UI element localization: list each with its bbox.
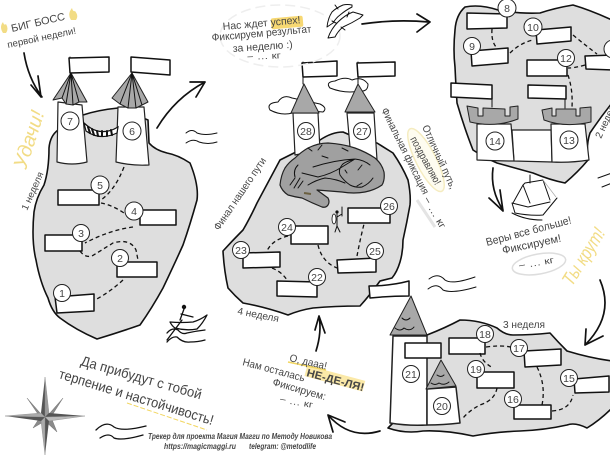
checkpoint 12	[527, 50, 574, 76]
label: week 4: 4 неделя	[236, 306, 280, 325]
dragon	[280, 143, 384, 207]
tower 21	[390, 296, 427, 425]
waves near week 1	[186, 130, 217, 144]
slogan: patience: терпение и настойчивость!	[57, 366, 216, 428]
checkpoint 25: 25	[369, 246, 381, 258]
heading: big boss: БИГ БОСС	[10, 11, 67, 35]
tower 27: 27	[356, 126, 368, 138]
tower 6: 6	[129, 126, 135, 138]
slogan: patience: Да прибудут с тобой	[79, 353, 204, 402]
speech bubble: success: Фиксируем результат	[211, 23, 312, 44]
castle with towers 14 and 13: 13	[563, 135, 575, 147]
arrow: up to week 4	[315, 316, 325, 351]
checkpoint 22: 22	[311, 272, 323, 284]
arrow: to week 3	[585, 280, 605, 345]
credits: https://magicmaggi.ru	[164, 442, 236, 451]
checkpoint 2: 2	[117, 253, 123, 265]
island: week 4	[223, 61, 410, 315]
tower 28: 28	[300, 126, 312, 138]
icon: person in rowing boat	[167, 305, 207, 342]
speech bubble: success: − … кг	[247, 50, 282, 62]
flag of tower 21	[405, 343, 441, 358]
heading: big boss: первой недели!	[6, 26, 77, 51]
checkpoint 25	[337, 242, 384, 273]
text: congratulations: Отличный путь,	[419, 123, 459, 191]
label: week 1: 1 неделя	[20, 170, 46, 212]
checkpoint 11	[585, 40, 610, 70]
credits	[148, 432, 332, 451]
tower 21: 21	[405, 369, 417, 381]
checkpoint 17	[510, 340, 561, 367]
checkpoint 22	[277, 268, 326, 297]
checkpoint 1: 1	[59, 288, 65, 300]
icon: dolphins	[327, 4, 363, 38]
text: congratulations	[401, 123, 459, 196]
island: week 3	[388, 296, 610, 436]
tower 20: 20	[436, 401, 448, 413]
island: week 1	[33, 57, 197, 339]
path dashes week 4	[267, 224, 364, 280]
label: final measurement: − … кг	[420, 195, 448, 231]
checkpoint 26: 26	[383, 201, 395, 213]
checkpoint 2	[112, 250, 157, 277]
label: final measurement	[378, 106, 448, 231]
checkpoint 4: 4	[131, 206, 137, 218]
checkpoint 18: 18	[479, 329, 491, 341]
cloud right	[328, 78, 368, 92]
arrow: week 2 down	[489, 168, 503, 211]
heading: big boss	[1, 8, 77, 51]
arrow: week 1 to finale	[157, 82, 205, 128]
checkpoint 16	[504, 390, 551, 419]
path dashes week 3	[463, 346, 573, 418]
waves bottom	[96, 424, 146, 439]
icon: flames	[1, 8, 77, 33]
checkpoint 23	[232, 242, 280, 268]
cloud left	[269, 97, 325, 114]
arrow: from big boss to castle	[24, 53, 42, 97]
speech bubble: success: за неделю :)	[232, 39, 293, 55]
arrow: week 3 to week 4	[328, 415, 380, 433]
checkpoint 9: 9	[469, 41, 475, 53]
text: one week left: Фиксируем:	[271, 376, 327, 403]
icon: compass rose	[5, 377, 85, 455]
label: week 3: 3 неделя	[503, 320, 545, 331]
castle with towers 14 and 13: 14	[489, 136, 501, 148]
arrow: to week 2	[362, 14, 430, 32]
credits: telegram: @metodlife	[249, 442, 316, 451]
text: one week left: НЕ-ДЕ-ЛЯ!	[305, 367, 365, 394]
flag on shore of week 4 island	[369, 281, 409, 298]
text: one week left	[241, 352, 365, 410]
waves above week 3	[428, 276, 476, 291]
text: one week left: Нам осталась	[241, 356, 307, 385]
checkpoint 10: 10	[527, 22, 539, 34]
icon: sailing ship	[512, 175, 557, 220]
checkpoint 5	[58, 176, 109, 205]
text: one week left: − … кг	[279, 394, 315, 410]
checkpoint 4	[125, 202, 176, 225]
checkpoint 10	[524, 18, 571, 44]
checkpoint 24: 24	[281, 222, 293, 234]
checkpoint 5: 5	[97, 180, 103, 192]
checkpoint 3: 3	[78, 228, 84, 240]
text: more faith: Фиксируем!	[501, 233, 562, 257]
tower 6	[112, 57, 170, 165]
label: final measurement: Финальная фиксация	[378, 106, 431, 196]
text: congratulations: поздравляю!	[407, 135, 443, 187]
credits: Трекер для проекта Магия Магги по Методу Новикова	[148, 432, 332, 441]
checkpoint 15	[560, 370, 609, 393]
speech bubble: success: Нас ждет успех!	[222, 14, 301, 33]
checkpoint 8	[467, 0, 516, 29]
checkpoint 9	[464, 38, 508, 66]
checkpoint 19	[468, 360, 514, 388]
motivational word: good luck: Удачи!	[10, 107, 49, 172]
castle with towers 14 and 13	[451, 83, 591, 162]
checkpoint 15: 15	[563, 373, 575, 385]
tower 7: 7	[67, 116, 73, 128]
tower 20	[426, 360, 460, 425]
text: more faith: Веры все больше!	[485, 215, 573, 249]
checkpoint 18	[449, 326, 494, 354]
tower 27	[328, 62, 395, 160]
bridge between towers	[84, 123, 118, 137]
checkpoint 24	[278, 218, 328, 244]
checkpoint 3	[45, 224, 90, 251]
text: more faith: − … кг	[518, 255, 556, 271]
island: week 2	[451, 0, 610, 183]
checkpoint 8: 8	[504, 3, 510, 15]
path dashes week 2	[492, 29, 597, 107]
checkpoint 1	[54, 284, 94, 313]
checkpoint 17: 17	[513, 343, 525, 355]
text: more faith	[485, 215, 573, 279]
checkpoint 19: 19	[470, 364, 482, 376]
tower 7	[53, 57, 109, 164]
checkpoint 23: 23	[235, 245, 247, 257]
speech bubble: success	[211, 5, 340, 67]
text: one week left: О, даaa!	[288, 352, 328, 372]
small knight with shield	[332, 207, 342, 232]
path dashes week 1	[80, 167, 138, 300]
tower 28	[269, 61, 337, 155]
checkpoint 16: 16	[507, 394, 519, 406]
checkpoint 12: 12	[560, 53, 572, 65]
checkpoint 26	[348, 198, 398, 223]
waves right of ship	[598, 173, 610, 187]
label: end of our path: Финал нашего пути	[212, 155, 269, 233]
